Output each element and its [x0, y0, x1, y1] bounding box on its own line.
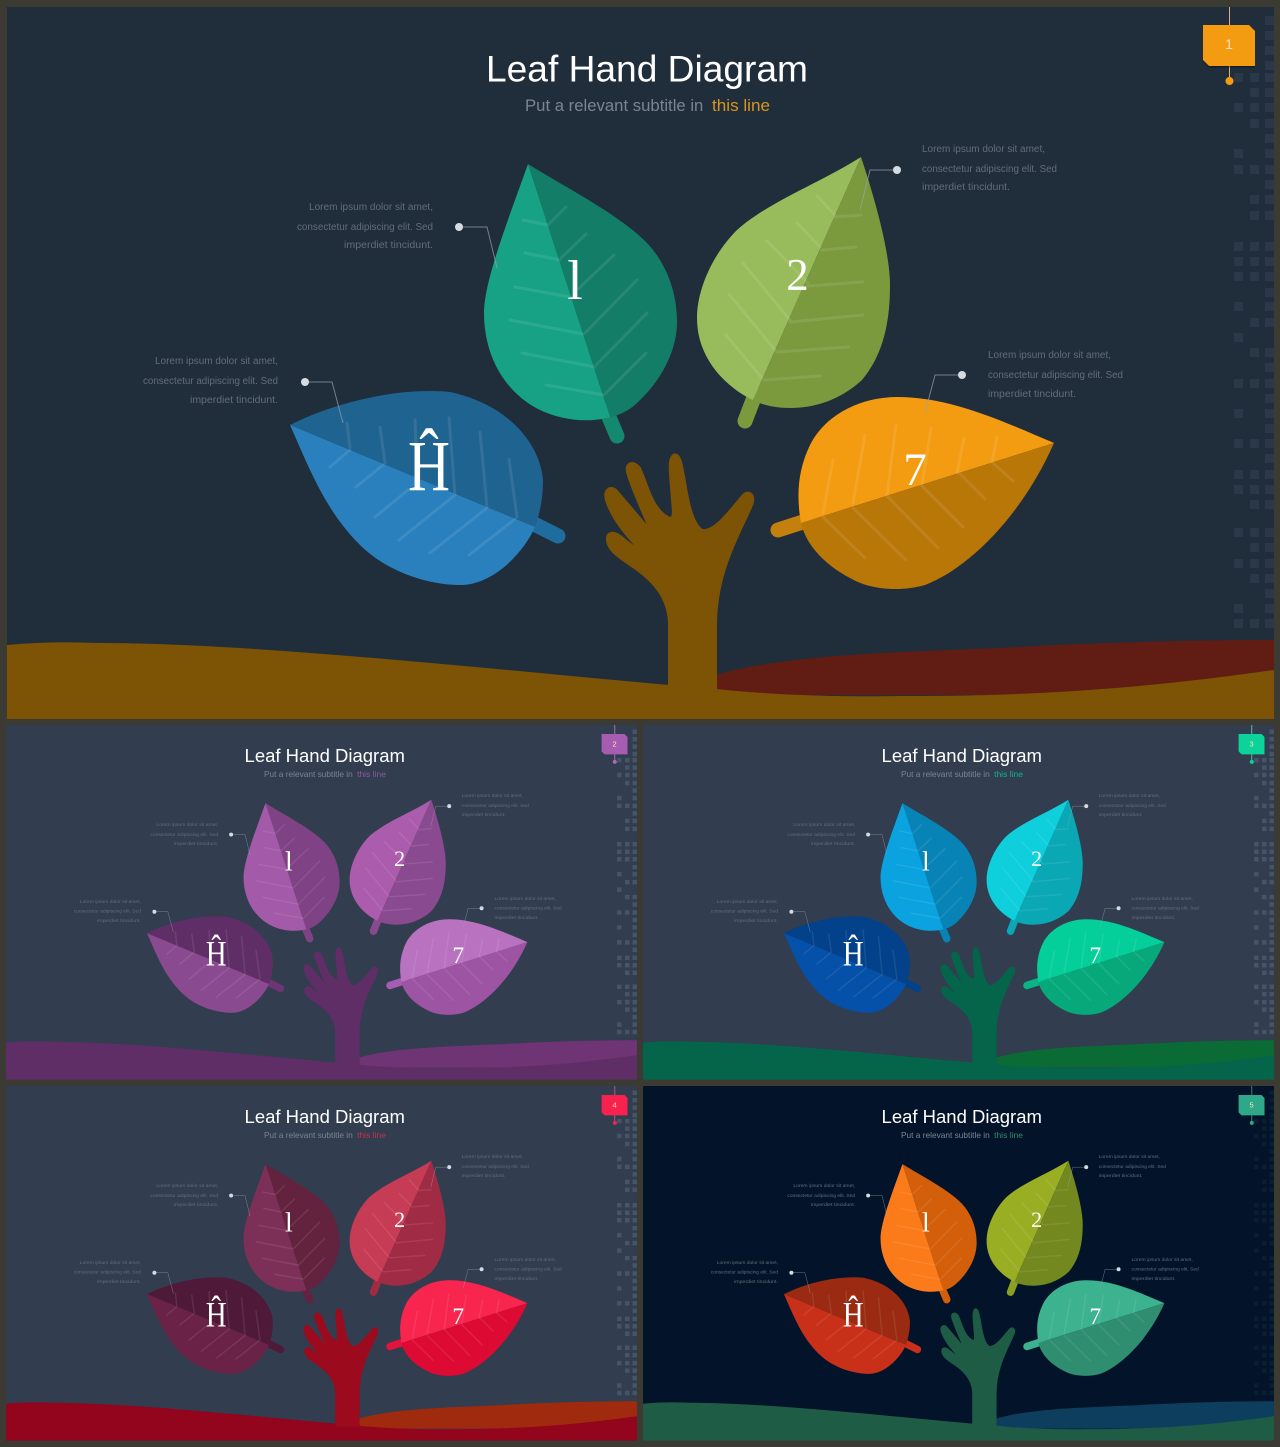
- subtitle: Put a relevant subtitle in: [264, 1130, 355, 1140]
- callout 4: consectetur adipiscing elit. Sed: [1132, 906, 1199, 912]
- callout: blue leaf: [143, 356, 343, 423]
- leaf 2: 2: [394, 1207, 405, 1232]
- leaf 1: [881, 803, 977, 939]
- decorative grid: [617, 1090, 637, 1395]
- callout: teal leaf: [297, 202, 497, 268]
- ground back hill: [359, 1401, 637, 1429]
- leaf 3: Ĥ: [843, 934, 864, 974]
- hand tree: [941, 1309, 1015, 1426]
- leaf 4: 7: [452, 943, 464, 969]
- subtitle: Put a relevant subtitle in: [901, 1130, 992, 1140]
- badge: slide number: 5: [1249, 1100, 1254, 1109]
- callout 4: [1100, 1257, 1199, 1288]
- callout 4: imperdiet tincidunt.: [495, 915, 538, 921]
- callout 1: [150, 1183, 250, 1216]
- leaf 4: 7: [1089, 943, 1101, 969]
- badge: slide number: [1239, 725, 1265, 764]
- leaf 1: [244, 803, 340, 939]
- subtitle: Put a relevant subtitle in: [525, 96, 708, 115]
- leaf 1: [881, 1164, 977, 1300]
- callout 3: imperdiet tincidunt.: [1099, 1173, 1142, 1179]
- callout: orange leaf: Lorem ipsum dolor sit amet,: [988, 350, 1111, 361]
- leaf: blue: Ĥ: [408, 426, 450, 506]
- callout 4: [463, 1257, 562, 1288]
- leaf 4: [1027, 919, 1164, 1015]
- callout 3: imperdiet tincidunt.: [462, 812, 505, 818]
- title: Leaf Hand Diagram: [486, 48, 808, 90]
- callout 3: [1068, 1154, 1166, 1187]
- callout 1: consectetur adipiscing elit. Sed: [787, 1193, 855, 1199]
- callout 2: imperdiet tincidunt.: [97, 918, 141, 924]
- callout 1: [787, 1183, 887, 1216]
- callout 4: imperdiet tincidunt.: [495, 1276, 538, 1282]
- badge: slide number: [602, 725, 628, 764]
- leaf: blue: [290, 391, 558, 585]
- callout 1: Lorem ipsum dolor sit amet,: [156, 1183, 218, 1189]
- callout 2: Lorem ipsum dolor sit amet,: [717, 899, 778, 905]
- title: Leaf Hand Diagram: [245, 745, 405, 766]
- callout 1: [150, 822, 250, 855]
- callout: blue leaf: imperdiet tincidunt.: [190, 395, 278, 406]
- callout 3: consectetur adipiscing elit. Sed: [462, 1164, 529, 1170]
- panel: blue-green slide 3: [643, 725, 1274, 1080]
- leaf 1: l: [285, 1207, 293, 1238]
- callout 3: Lorem ipsum dolor sit amet,: [462, 793, 523, 799]
- callout 4: imperdiet tincidunt.: [1132, 1276, 1175, 1282]
- subtitle: this line: [994, 769, 1023, 779]
- decorative grid: [1234, 16, 1274, 628]
- callout 3: consectetur adipiscing elit. Sed: [1099, 1164, 1166, 1170]
- ground back hill: [996, 1401, 1274, 1429]
- leaf 1: l: [922, 846, 930, 877]
- leaf 3: Ĥ: [843, 1295, 864, 1335]
- subtitle: Put a relevant subtitle in: [264, 769, 355, 779]
- callout 2: [711, 899, 810, 932]
- badge: slide number: [1239, 1086, 1265, 1125]
- callout 2: [711, 1260, 810, 1293]
- subtitle: this line: [357, 769, 386, 779]
- callout 2: [74, 899, 173, 932]
- callout 3: consectetur adipiscing elit. Sed: [462, 803, 529, 809]
- hand tree: [941, 948, 1015, 1065]
- callout 2: [74, 1260, 173, 1293]
- leaf 2: [987, 800, 1083, 931]
- decorative grid: [1254, 729, 1274, 1034]
- callout 3: consectetur adipiscing elit. Sed: [1099, 803, 1166, 809]
- callout 3: [431, 1154, 529, 1187]
- hand tree: [304, 1309, 378, 1426]
- title: Leaf Hand Diagram: [882, 1106, 1042, 1127]
- callout 3: imperdiet tincidunt.: [462, 1173, 505, 1179]
- callout 4: [463, 896, 562, 927]
- hand tree: [605, 454, 753, 690]
- callout 4: [1100, 896, 1199, 927]
- callout 4: consectetur adipiscing elit. Sed: [495, 906, 562, 912]
- callout: blue leaf: Lorem ipsum dolor sit amet,: [155, 356, 278, 367]
- callout 2: Lorem ipsum dolor sit amet,: [80, 1260, 141, 1266]
- hand tree: [304, 948, 378, 1065]
- leaf 1: [244, 1164, 340, 1300]
- callout 3: Lorem ipsum dolor sit amet,: [462, 1154, 523, 1160]
- callout: green leaf: [860, 144, 1057, 210]
- callout 4: Lorem ipsum dolor sit amet,: [1132, 896, 1193, 902]
- leaf 4: 7: [452, 1304, 464, 1330]
- callout 2: imperdiet tincidunt.: [97, 1279, 141, 1285]
- callout: orange leaf: [925, 350, 1123, 413]
- callout: orange leaf: consectetur adipiscing elit. Sed: [988, 370, 1123, 381]
- badge: slide number: [602, 1086, 628, 1125]
- title: Leaf Hand Diagram: [882, 745, 1042, 766]
- badge: slide number: 3: [1249, 739, 1254, 748]
- callout 4: Lorem ipsum dolor sit amet,: [495, 896, 556, 902]
- leaf 4: [390, 1280, 527, 1376]
- callout 1: Lorem ipsum dolor sit amet,: [793, 822, 855, 828]
- leaf 3: [784, 1277, 917, 1374]
- callout: teal leaf: imperdiet tincidunt.: [344, 240, 433, 251]
- leaf 4: [1027, 1280, 1164, 1376]
- leaf 3: [147, 916, 280, 1013]
- panel: dark navy slide 5: [643, 1086, 1274, 1441]
- callout: teal leaf: Lorem ipsum dolor sit amet,: [309, 202, 433, 213]
- subtitle: this line: [357, 1130, 386, 1140]
- subtitle: Put a relevant subtitle in: [901, 769, 992, 779]
- decorative grid: [617, 729, 637, 1034]
- callout 4: Lorem ipsum dolor sit amet,: [495, 1257, 556, 1263]
- ground back hill: [716, 640, 1274, 695]
- leaf 3: [147, 1277, 280, 1374]
- leaf 2: [350, 1161, 446, 1292]
- leaf 4: [390, 919, 527, 1015]
- leaf: green: 2: [786, 250, 809, 300]
- leaf: green: [697, 157, 890, 421]
- leaf 3: Ĥ: [206, 934, 227, 974]
- callout: green leaf: Lorem ipsum dolor sit amet,: [922, 144, 1045, 155]
- callout 1: imperdiet tincidunt.: [174, 841, 218, 847]
- ground back hill: [996, 1040, 1274, 1068]
- panel: purple slide 2: [6, 725, 637, 1080]
- callout 1: consectetur adipiscing elit. Sed: [150, 832, 218, 838]
- leaf 3: Ĥ: [206, 1295, 227, 1335]
- callout 3: Lorem ipsum dolor sit amet,: [1099, 1154, 1160, 1160]
- callout 2: consectetur adipiscing elit. Sed: [711, 1270, 778, 1276]
- callout 1: imperdiet tincidunt.: [174, 1202, 218, 1208]
- callout 4: Lorem ipsum dolor sit amet,: [1132, 1257, 1193, 1263]
- callout 4: consectetur adipiscing elit. Sed: [1132, 1267, 1199, 1273]
- callout 2: consectetur adipiscing elit. Sed: [74, 1270, 141, 1276]
- badge: slide number: 1: [1225, 36, 1233, 52]
- callout: green leaf: consectetur adipiscing elit. Sed: [922, 164, 1057, 175]
- leaf: teal: [484, 164, 677, 436]
- callout 2: consectetur adipiscing elit. Sed: [74, 909, 141, 915]
- callout: orange leaf: imperdiet tincidunt.: [988, 389, 1076, 400]
- callout 1: Lorem ipsum dolor sit amet,: [793, 1183, 855, 1189]
- callout 3: imperdiet tincidunt.: [1099, 812, 1142, 818]
- badge: slide number: 4: [612, 1100, 617, 1109]
- leaf 2: 2: [1031, 1207, 1042, 1232]
- decorative grid: [1254, 1090, 1274, 1395]
- ground front hill: [643, 1402, 1274, 1441]
- leaf 4: 7: [1089, 1304, 1101, 1330]
- leaf: orange: 7: [903, 444, 927, 496]
- callout 3: [1068, 793, 1166, 826]
- panel: main slide 1: [7, 7, 1274, 719]
- leaf 2: [350, 800, 446, 931]
- callout: blue leaf: consectetur adipiscing elit. Sed: [143, 376, 278, 387]
- callout 2: Lorem ipsum dolor sit amet,: [717, 1260, 778, 1266]
- callout 1: imperdiet tincidunt.: [811, 1202, 855, 1208]
- callout 2: imperdiet tincidunt.: [734, 918, 778, 924]
- callout 1: consectetur adipiscing elit. Sed: [150, 1193, 218, 1199]
- callout 4: consectetur adipiscing elit. Sed: [495, 1267, 562, 1273]
- badge: slide number: 2: [612, 739, 617, 748]
- subtitle: this line: [712, 96, 770, 115]
- leaf: orange: [778, 397, 1054, 589]
- ground front hill: [643, 1041, 1274, 1080]
- callout 2: Lorem ipsum dolor sit amet,: [80, 899, 141, 905]
- ground front hill: [7, 642, 1274, 719]
- panel: red slide 4: [6, 1086, 637, 1441]
- ground front hill: [6, 1041, 637, 1080]
- callout 1: imperdiet tincidunt.: [811, 841, 855, 847]
- callout 1: Lorem ipsum dolor sit amet,: [156, 822, 218, 828]
- callout 3: [431, 793, 529, 826]
- callout 2: imperdiet tincidunt.: [734, 1279, 778, 1285]
- subtitle: this line: [994, 1130, 1023, 1140]
- leaf 1: l: [285, 846, 293, 877]
- callout 2: consectetur adipiscing elit. Sed: [711, 909, 778, 915]
- callout 4: imperdiet tincidunt.: [1132, 915, 1175, 921]
- ground back hill: [359, 1040, 637, 1068]
- leaf 2: 2: [394, 846, 405, 871]
- leaf 2: [987, 1161, 1083, 1292]
- leaf 2: 2: [1031, 846, 1042, 871]
- leaf 3: [784, 916, 917, 1013]
- callout 1: [787, 822, 887, 855]
- callout 3: Lorem ipsum dolor sit amet,: [1099, 793, 1160, 799]
- leaf 1: l: [922, 1207, 930, 1238]
- callout: teal leaf: consectetur adipiscing elit. Sed: [297, 222, 433, 233]
- callout 1: consectetur adipiscing elit. Sed: [787, 832, 855, 838]
- ground front hill: [6, 1402, 637, 1441]
- callout: green leaf: imperdiet tincidunt.: [922, 182, 1010, 193]
- badge: slide number: [1203, 7, 1255, 85]
- title: Leaf Hand Diagram: [245, 1106, 405, 1127]
- leaf: teal: l: [567, 250, 583, 312]
